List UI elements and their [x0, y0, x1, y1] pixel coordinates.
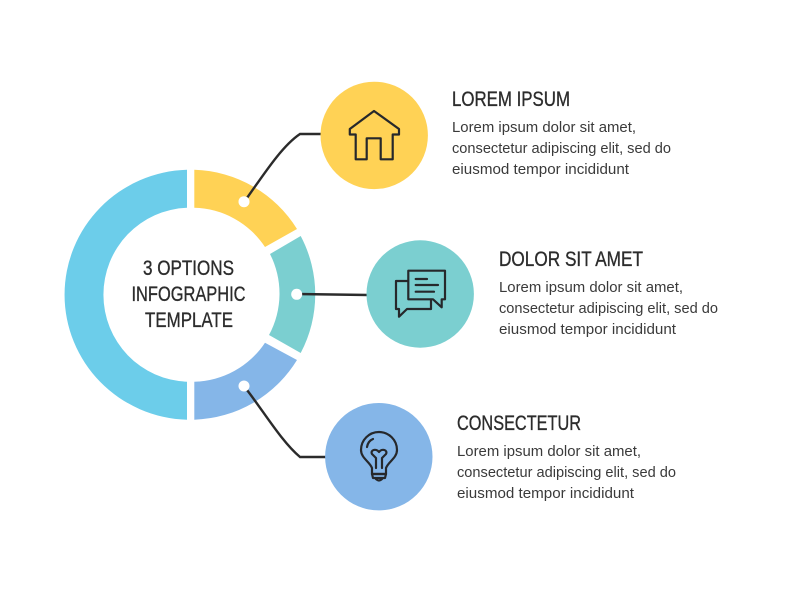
- center title: TEMPLATE: [145, 309, 233, 332]
- ring segment: teal: [269, 236, 315, 353]
- center title: [132, 257, 246, 332]
- text block: consectetur: [457, 412, 676, 502]
- connector: yellow: [247, 134, 322, 198]
- body: consectetur adipiscing elit, sed do: [457, 465, 676, 481]
- body: [499, 280, 718, 338]
- body: eiusmod tempor incididunt: [499, 322, 676, 338]
- body: eiusmod tempor incididunt: [452, 162, 629, 178]
- teal circle with chat icon: [366, 240, 474, 348]
- yellow circle with house icon: [320, 82, 428, 189]
- heading: LOREM IPSUM: [452, 88, 570, 111]
- heading: CONSECTETUR: [457, 412, 581, 435]
- body: Lorem ipsum dolor sit amet,: [499, 280, 683, 296]
- body: [452, 120, 671, 178]
- body: [457, 444, 676, 502]
- ring segment: blue: [194, 343, 297, 420]
- heading: DOLOR SIT AMET: [499, 248, 643, 271]
- blue circle with light bulb icon: [325, 403, 432, 510]
- ring segment: yellow: [194, 170, 297, 247]
- text block: lorem ipsum: [452, 88, 671, 178]
- connector dots: [238, 196, 302, 392]
- text block: dolor sit amet: [499, 248, 718, 338]
- body: Lorem ipsum dolor sit amet,: [457, 444, 641, 460]
- body: consectetur adipiscing elit, sed do: [452, 141, 671, 157]
- body: eiusmod tempor incididunt: [457, 486, 634, 502]
- connector: blue: [247, 390, 327, 457]
- center title: INFOGRAPHIC: [132, 283, 246, 306]
- donut ring: [65, 170, 315, 420]
- center title: 3 OPTIONS: [143, 257, 234, 280]
- ring segment: large left half: [65, 170, 187, 420]
- icon: light bulb: [361, 432, 397, 480]
- icon: chat bubbles: [396, 271, 445, 317]
- body: Lorem ipsum dolor sit amet,: [452, 120, 636, 136]
- icon: house: [350, 111, 399, 159]
- body: consectetur adipiscing elit, sed do: [499, 301, 718, 317]
- connector: teal: [297, 294, 368, 295]
